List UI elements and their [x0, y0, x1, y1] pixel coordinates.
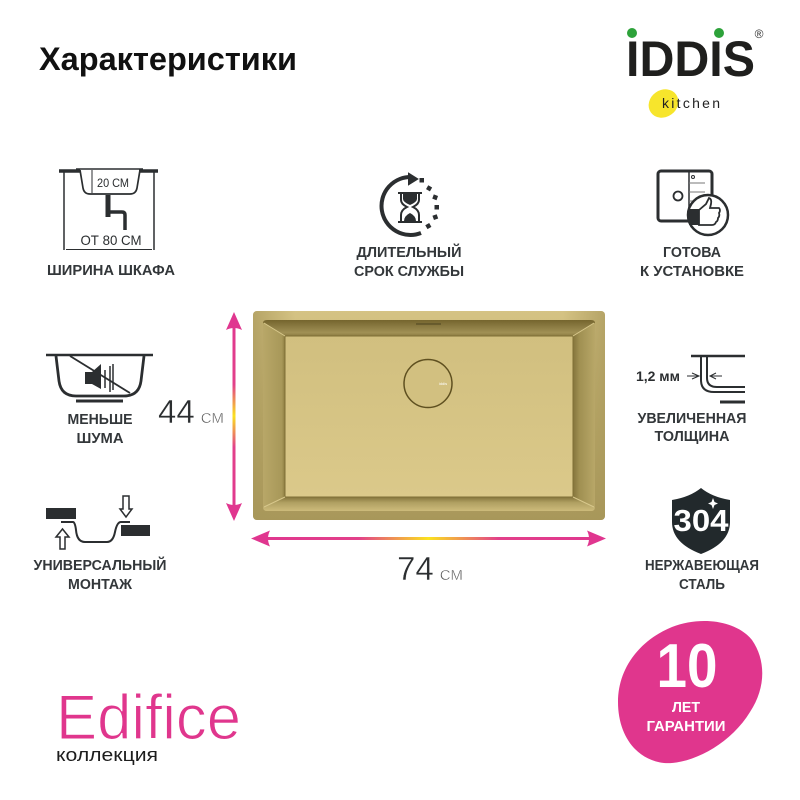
warranty label: ЛЕТ — [672, 700, 700, 716]
sink rim — [253, 311, 605, 520]
sink floor — [285, 336, 573, 497]
sink bottom wall — [263, 497, 595, 511]
label: less noise: МЕНЬШЕ — [68, 412, 133, 428]
label: universal mounting: УНИВЕРСАЛЬНЫЙ — [34, 556, 166, 574]
arrow: height — [226, 312, 242, 521]
panel — [658, 171, 712, 221]
sink corner highlights — [264, 323, 594, 507]
icon: less noise — [46, 355, 153, 401]
icon label: 20 cm: 20 СМ — [97, 176, 129, 190]
sink top wall — [263, 320, 595, 336]
sink right wall — [573, 323, 595, 507]
label: increased thickness: ТОЛЩИНА — [654, 429, 730, 445]
warranty number: 10 — [656, 632, 718, 701]
cycle arrow — [382, 177, 421, 235]
collection caption: коллекция — [56, 744, 158, 765]
overflow — [416, 323, 441, 325]
drain — [404, 360, 452, 408]
label: ready to install: ГОТОВА — [663, 245, 722, 261]
icon: universal mounting — [46, 496, 150, 549]
title: Характеристики — [39, 41, 297, 77]
icon: 304 shield — [672, 488, 730, 554]
sparkle — [708, 498, 718, 509]
thickness value: 1,2 мм — [636, 368, 680, 384]
arrow up — [56, 529, 69, 549]
warranty label: ГАРАНТИИ — [646, 719, 726, 735]
icon: cabinet width — [59, 169, 158, 250]
logo kitchen: kitchen — [662, 95, 720, 111]
logo: IDDIS kitchen — [626, 27, 764, 123]
label: universal mounting: МОНТАЖ — [68, 577, 133, 593]
label: stainless steel: СТАЛЬ — [679, 577, 725, 593]
drain logo: iddis — [439, 381, 447, 386]
hourglass — [398, 193, 422, 222]
dimension: 74 cm: 74 СМ — [397, 550, 463, 587]
thumb badge — [688, 195, 728, 235]
collection name: Edifice — [56, 683, 241, 753]
sink left wall — [263, 323, 285, 507]
label: long service life: СРОК СЛУЖБЫ — [354, 264, 464, 280]
label: stainless steel: НЕРЖАВЕЮЩАЯ — [645, 558, 759, 574]
logo green dots — [627, 28, 724, 38]
icon label: from 80 cm: ОТ 80 СМ — [80, 232, 142, 248]
arrow down — [120, 496, 132, 517]
logo registered mark: ® — [755, 27, 764, 41]
warranty badge — [618, 621, 762, 763]
icon: long service life — [382, 174, 439, 235]
label: long service life: ДЛИТЕЛЬНЫЙ — [356, 243, 462, 261]
arrow: width — [251, 530, 606, 546]
logo wordmark: IDDIS — [626, 31, 755, 87]
dots — [420, 178, 439, 229]
label: less noise: ШУМА — [76, 431, 124, 447]
icon: ready to install — [658, 171, 728, 235]
speaker — [85, 364, 101, 389]
badge blob — [618, 621, 762, 763]
icon: thickness 1.2 mm — [636, 356, 745, 402]
label: increased thickness: УВЕЛИЧЕННАЯ — [638, 411, 746, 427]
shield number: 304 — [674, 503, 729, 538]
logo yellow blob — [643, 84, 684, 123]
sink — [253, 311, 605, 520]
label: cabinet width: ШИРИНА ШКАФА — [47, 263, 176, 279]
dimension: 44 cm: 44 СМ — [158, 393, 224, 430]
label: ready to install: К УСТАНОВКЕ — [640, 264, 744, 280]
